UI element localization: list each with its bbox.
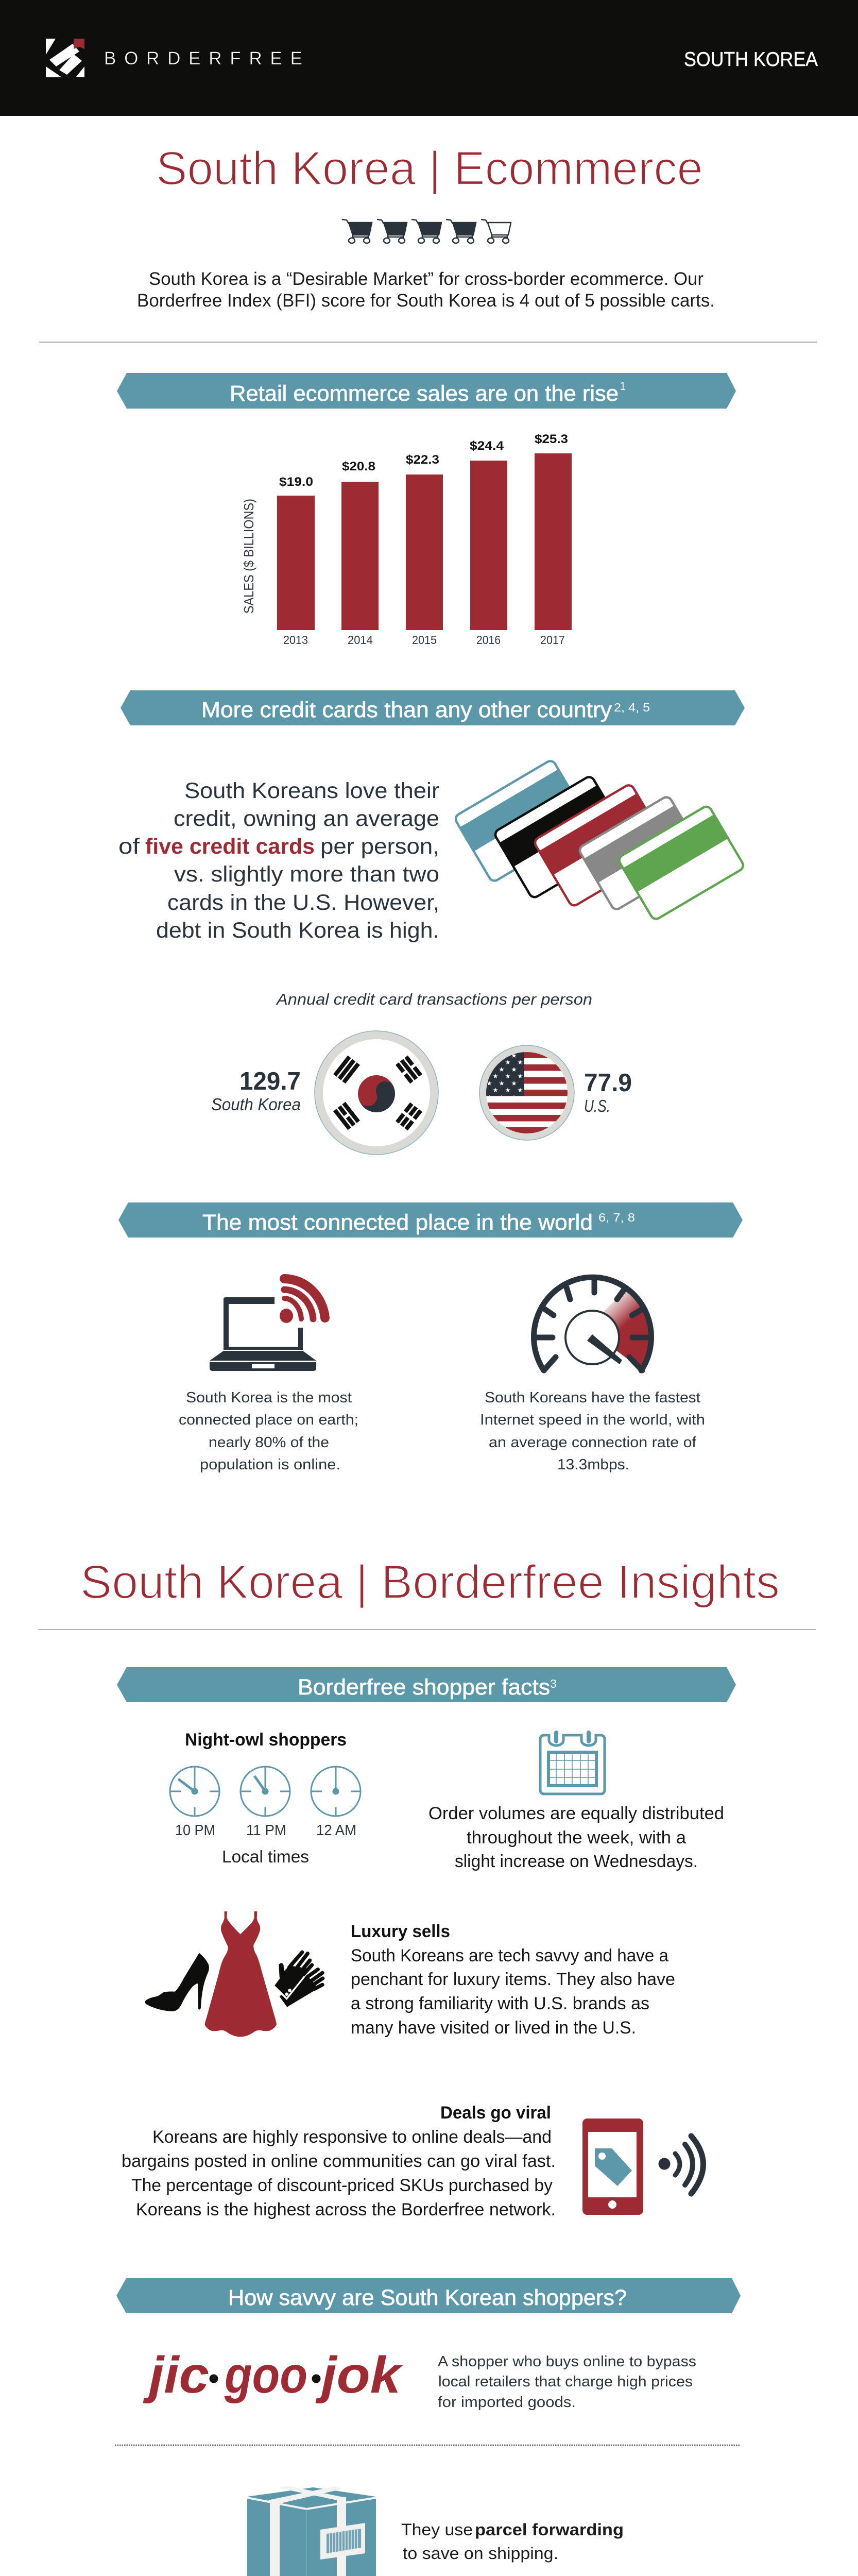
text: order volumes: slight increase on Wednesdays. bbox=[455, 1852, 698, 1871]
year labels: 2015 bbox=[412, 633, 437, 647]
text: most connected: connected place on earth; bbox=[179, 1412, 358, 1428]
stat: South Korea: 129.7 bbox=[239, 1067, 301, 1095]
banner: shopper facts: 3 bbox=[550, 1677, 557, 1690]
icon: dress, shoe, gloves bbox=[145, 1911, 323, 2037]
banner: credit cards: 2, 4, 5 bbox=[614, 701, 650, 714]
year labels: 2017 bbox=[540, 633, 565, 647]
text: luxury sells bbox=[351, 1922, 675, 2038]
icon: five credit cards bbox=[454, 759, 745, 921]
icon: parcel box bbox=[247, 2486, 376, 2576]
banner: retail ecommerce bbox=[117, 373, 736, 409]
bars bbox=[277, 453, 572, 630]
value labels: $19.0 bbox=[279, 475, 313, 489]
value labels: $24.4 bbox=[470, 439, 504, 453]
text: luxury sells: many have visited or lived in the U.S. bbox=[351, 2018, 636, 2038]
shoe bbox=[145, 1953, 209, 2011]
heading: night-owl shoppers: Night-owl shoppers bbox=[185, 1730, 347, 1750]
text: luxury sells: a strong familiarity with U.S. brands as bbox=[351, 1994, 649, 2013]
taegeuk bbox=[353, 1070, 400, 1117]
icon: US flag bbox=[479, 1045, 574, 1140]
value labels: $25.3 bbox=[535, 432, 568, 446]
shipping label bbox=[320, 2523, 365, 2560]
card green bbox=[617, 805, 745, 921]
bar chart: retail ecommerce sales bbox=[241, 432, 572, 647]
icon: phone with tag and signal bbox=[582, 2119, 703, 2215]
text: parcel forwarding bbox=[401, 2520, 624, 2563]
text: luxury sells: Luxury sells bbox=[351, 1922, 450, 1941]
icon: South Korea flag bbox=[315, 1031, 438, 1155]
term: jic-goo-jok: jok bbox=[315, 2346, 403, 2404]
text: South Koreans love credit: credit, owning an average bbox=[174, 806, 439, 831]
clock 11 PM bbox=[241, 1767, 290, 1816]
cart 3 bbox=[411, 219, 441, 243]
stat: US: U.S. bbox=[584, 1096, 610, 1115]
banner: credit cards bbox=[121, 690, 745, 725]
card red bbox=[533, 783, 670, 907]
text: South Koreans love credit bbox=[118, 778, 439, 943]
year labels: 2013 bbox=[283, 633, 308, 647]
text: term definition: for imported goods. bbox=[438, 2394, 576, 2411]
clock labels: 12 AM bbox=[316, 1822, 356, 1839]
card black bbox=[493, 775, 630, 899]
text: deals go viral: Koreans is the highest across the Borderfree network. bbox=[136, 2200, 556, 2219]
text: fastest internet: South Koreans have the fastest bbox=[485, 1389, 700, 1406]
text: parcel forwarding: to save on shipping. bbox=[403, 2544, 558, 2563]
banner: credit cards: More credit cards than any other country bbox=[201, 698, 612, 722]
text: order volumes bbox=[428, 1804, 724, 1871]
intro text bbox=[137, 269, 715, 311]
text: fastest internet bbox=[480, 1389, 705, 1473]
gloves bbox=[273, 1952, 323, 2007]
banner: retail ecommerce: Retail ecommerce sales are on the rise bbox=[230, 381, 619, 406]
text: order volumes: Order volumes are equally distributed bbox=[428, 1804, 724, 1823]
header country label: SOUTH KOREA bbox=[684, 48, 818, 71]
text: deals go viral: Deals go viral bbox=[440, 2103, 551, 2123]
card gray bbox=[578, 795, 705, 911]
cart 4 bbox=[446, 219, 476, 243]
dress bbox=[205, 1911, 277, 2037]
year labels: 2014 bbox=[348, 633, 373, 647]
card teal bbox=[454, 759, 591, 883]
y axis label: SALES ($ BILLIONS) bbox=[241, 499, 256, 614]
icon: calendar bbox=[540, 1733, 605, 1794]
text: South Koreans love credit: vs. slightly more than two bbox=[174, 862, 439, 887]
text: luxury sells: South Koreans are tech savvy and have a bbox=[351, 1946, 668, 1965]
text: term definition: A shopper who buys online to bypass bbox=[438, 2353, 696, 2370]
banner: shopper facts bbox=[117, 1667, 736, 1702]
intro text: South Korea is a “Desirable Market” for cross-border ecommerce. Our bbox=[149, 269, 703, 289]
intro text: Borderfree Index (BFI) score for South Korea is 4 out of 5 possible carts. bbox=[137, 291, 715, 311]
clock 10 PM bbox=[170, 1767, 219, 1816]
text: luxury sells: penchant for luxury items. They also have bbox=[351, 1970, 675, 1989]
value labels: $22.3 bbox=[406, 453, 439, 467]
text: deals go viral bbox=[122, 2103, 556, 2219]
banner: most connected bbox=[118, 1202, 743, 1238]
banner: most connected: 6, 7, 8 bbox=[598, 1211, 635, 1224]
header bar bbox=[0, 0, 858, 116]
banner: how savvy bbox=[116, 2278, 741, 2313]
text: parcel forwarding: parcel forwarding bbox=[475, 2520, 624, 2539]
banner: how savvy: How savvy are South Korean shoppers? bbox=[228, 2285, 627, 2310]
cart 1 bbox=[342, 219, 372, 243]
text: fastest internet: Internet speed in the world, with bbox=[480, 1412, 705, 1428]
stat: US: 77.9 bbox=[584, 1069, 632, 1097]
text: order volumes: throughout the week, with a bbox=[467, 1828, 686, 1848]
text: South Koreans love credit: per person, bbox=[320, 834, 439, 859]
text: deals go viral: Koreans are highly responsive to online deals—and bbox=[152, 2127, 552, 2147]
stat: South Korea: South Korea bbox=[211, 1095, 301, 1114]
icon: laptop with wifi bbox=[210, 1279, 325, 1371]
trigrams bbox=[333, 1056, 422, 1130]
text: most connected: South Korea is the most bbox=[186, 1389, 352, 1406]
clock labels: 10 PM bbox=[175, 1822, 215, 1839]
banner: shopper facts: Borderfree shopper facts bbox=[298, 1675, 550, 1700]
cart 2 bbox=[377, 219, 407, 243]
logo wordmark: BORDERFREE bbox=[104, 48, 302, 69]
title: Borderfree Insights: South Korea | Borderfree Insights bbox=[80, 1556, 780, 1608]
text: deals go viral: bargains posted in online communities can go viral fast. bbox=[122, 2151, 556, 2171]
text: parcel forwarding: They use bbox=[401, 2520, 473, 2539]
text: South Koreans love credit: South Koreans love their bbox=[184, 778, 439, 803]
text: South Koreans love credit: cards in the U.S. However, bbox=[167, 890, 439, 915]
year labels: 2016 bbox=[476, 633, 501, 647]
text: term definition: local retailers that charge high prices bbox=[438, 2374, 693, 2390]
icon: speedometer bbox=[534, 1277, 653, 1370]
text: most connected: nearly 80% of the bbox=[209, 1434, 329, 1451]
year labels bbox=[283, 633, 565, 647]
clock 12 AM bbox=[311, 1767, 361, 1816]
clock labels bbox=[175, 1822, 356, 1866]
text: deals go viral: The percentage of discount-priced SKUs purchased by bbox=[131, 2176, 553, 2195]
text: South Koreans love credit: five credit cards bbox=[145, 834, 315, 859]
title: South Korea Ecommerce: South Korea | Ecommerce bbox=[156, 142, 703, 195]
term: jic-goo-jok bbox=[143, 2346, 403, 2404]
term: jic-goo-jok: jic bbox=[143, 2346, 209, 2404]
term: jic-goo-jok: goo bbox=[224, 2346, 307, 2404]
text: term definition bbox=[438, 2353, 696, 2411]
logo mark bbox=[46, 39, 84, 77]
text: fastest internet: an average connection rate of bbox=[489, 1434, 697, 1451]
text: most connected bbox=[179, 1389, 358, 1473]
value labels: $20.8 bbox=[342, 460, 375, 473]
text: South Koreans love credit: debt in South Korea is high. bbox=[156, 918, 439, 943]
clocks bbox=[170, 1767, 361, 1816]
icon: five-cart rating bbox=[342, 219, 511, 243]
text: most connected: population is online. bbox=[200, 1456, 340, 1473]
value labels bbox=[279, 432, 568, 489]
clock labels: Local times bbox=[222, 1847, 309, 1866]
clock labels: 11 PM bbox=[246, 1822, 286, 1839]
text: fastest internet: 13.3mbps. bbox=[557, 1456, 629, 1473]
stat: South Korea bbox=[211, 1067, 301, 1114]
stat: US bbox=[584, 1069, 632, 1115]
caption: annual transactions: Annual credit card transactions per person bbox=[276, 990, 592, 1008]
wifi bbox=[280, 1279, 325, 1323]
banner: retail ecommerce: 1 bbox=[620, 379, 626, 393]
ribbons bbox=[247, 2486, 376, 2576]
cart 5 empty bbox=[481, 219, 511, 243]
text: South Koreans love credit: of bbox=[118, 834, 140, 859]
banner: most connected: The most connected place in the world bbox=[202, 1210, 593, 1235]
